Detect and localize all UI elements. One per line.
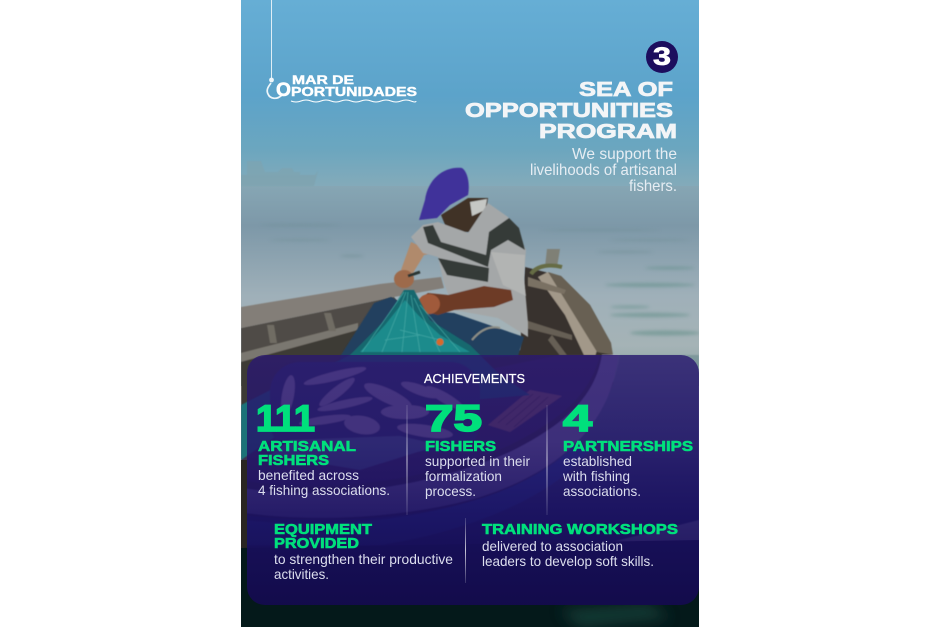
stat: 111 artisanal fishers: 4 fishing associations. [258, 482, 390, 498]
stat: 4 partnerships [562, 398, 693, 499]
stat: 111 artisanal fishers: 111 [256, 398, 315, 439]
title [465, 78, 677, 143]
stat: 111 artisanal fishers [256, 398, 390, 498]
stat: 75 fishers: FISHERS [425, 439, 496, 455]
stat: 4 partnerships: established [563, 453, 632, 469]
divider [406, 405, 408, 515]
fishing net [241, 290, 530, 460]
subtitle [530, 146, 677, 195]
title: OPPORTUNITIES [465, 99, 673, 122]
shirt stripes [423, 218, 525, 267]
item: training workshops [482, 522, 678, 569]
stat: 75 fishers: formalization [425, 468, 502, 484]
item: equipment provided: to strengthen their productive [274, 551, 453, 567]
stat: 75 fishers: 75 [425, 398, 482, 439]
boat hull left [241, 296, 397, 354]
left forearm [400, 242, 428, 274]
left edge strip [241, 460, 247, 548]
cap [419, 168, 469, 220]
stat: 75 fishers: supported in their [425, 453, 530, 469]
stat: 4 partnerships: PARTNERSHIPS [563, 439, 693, 455]
badge: number 3: 3 [653, 43, 671, 71]
boat bow right [241, 267, 614, 525]
stat: 111 artisanal fishers: ARTISANAL [258, 439, 356, 455]
item: training workshops: TRAINING WORKSHOPS [482, 522, 678, 538]
head and neck [441, 198, 488, 232]
heading: achievements: ACHIEVEMENTS [424, 371, 525, 386]
item: equipment provided [274, 522, 453, 582]
title: PROGRAM [539, 120, 677, 143]
title: SEA OF [579, 78, 673, 101]
dark water at bottom [241, 540, 699, 627]
fish pile [270, 362, 480, 470]
subtitle: livelihoods of artisanal [530, 162, 677, 179]
item: equipment provided: EQUIPMENT [274, 522, 372, 538]
divider [465, 518, 466, 583]
logo: Mar de Oportunidades with fishing hook [267, 0, 417, 102]
stat: 4 partnerships: with fishing [562, 468, 630, 484]
sea [241, 186, 700, 386]
fisher [340, 168, 528, 362]
subtitle: fishers. [629, 178, 677, 195]
wooden deck [488, 390, 562, 432]
stat: 4 partnerships: associations. [563, 483, 641, 499]
icon: wave underline [291, 100, 416, 102]
boat [241, 248, 699, 548]
icon: fishing line and hook [267, 0, 282, 98]
badge: number 3 [646, 41, 678, 73]
photo background: fisher in boat [241, 0, 700, 627]
stat: 111 artisanal fishers: FISHERS [258, 453, 329, 469]
hands [394, 270, 414, 288]
stat: 4 partnerships: 4 [563, 398, 593, 439]
stat: 75 fishers: process. [425, 483, 476, 499]
logo: Mar de Oportunidades with fishing hook: PORTUNIDADES [291, 85, 417, 99]
boat hull under panel [241, 354, 600, 460]
jeans [340, 297, 524, 362]
distant ship [242, 162, 316, 185]
shirt [411, 203, 528, 337]
item: training workshops: leaders to develop soft skills. [482, 553, 654, 569]
subtitle: We support the [572, 146, 677, 163]
divider [546, 405, 548, 515]
stat: 75 fishers [425, 398, 530, 499]
item: equipment provided: PROVIDED [274, 536, 359, 552]
item: equipment provided: activities. [274, 566, 329, 582]
stat: 111 artisanal fishers: benefited across [258, 467, 359, 483]
sleeve [491, 252, 526, 296]
logo: Mar de Oportunidades with fishing hook: O [276, 80, 291, 101]
right forearm [418, 286, 513, 315]
panel: achievements [247, 355, 699, 605]
sky [241, 0, 699, 190]
item: training workshops: delivered to association [482, 538, 623, 554]
logo: Mar de Oportunidades with fishing hook: MAR DE [292, 73, 354, 87]
